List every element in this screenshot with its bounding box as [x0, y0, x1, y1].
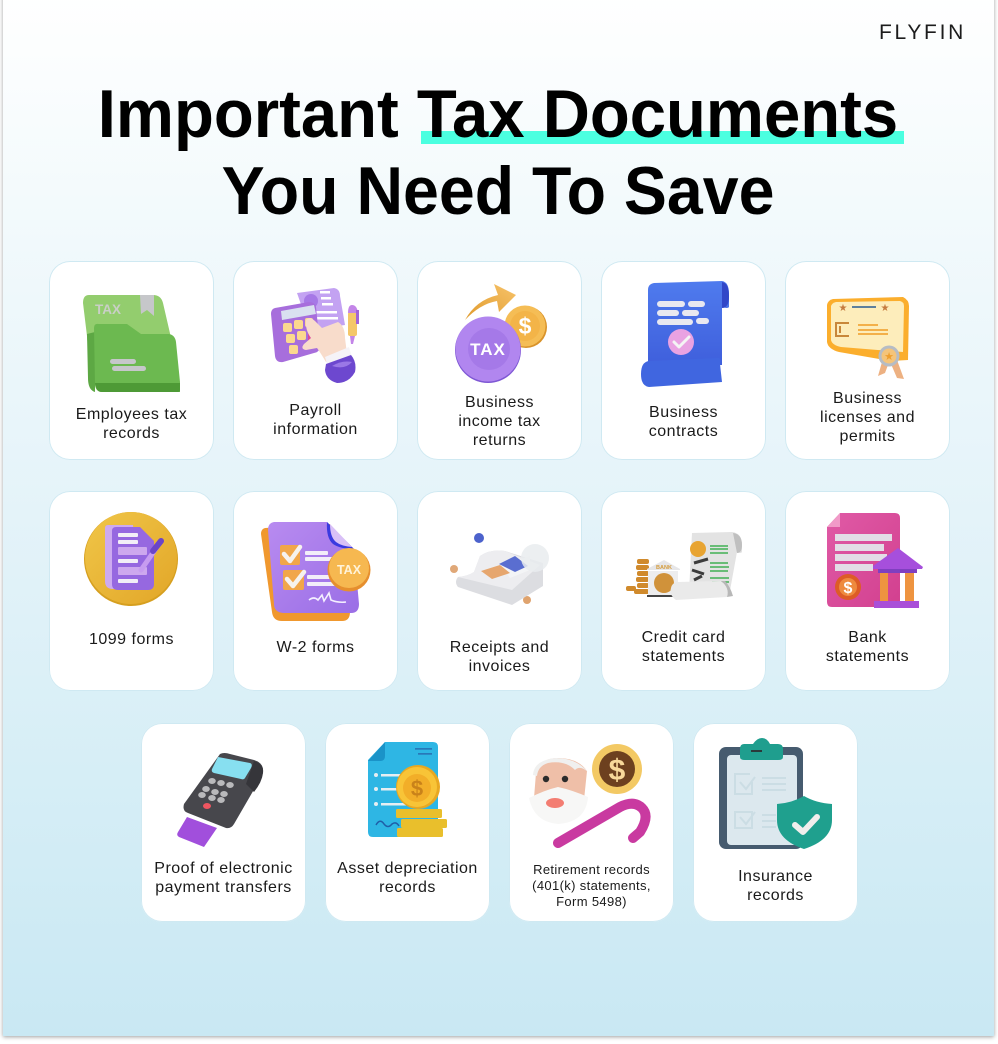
card: Employees tax records	[49, 261, 214, 460]
card: Proof of electronic payment transfers	[141, 723, 306, 922]
label: Payroll	[289, 402, 342, 419]
label: Business	[833, 390, 902, 407]
label: records	[379, 879, 436, 896]
icon: green tax folder	[83, 295, 180, 392]
label	[154, 860, 293, 896]
icon: blue document with coins	[368, 742, 447, 837]
icon: W-2 form with tax coin: TAX	[337, 563, 362, 577]
label: Credit card	[642, 629, 725, 646]
label	[738, 868, 813, 904]
icon: certificate with seal: ★	[839, 303, 848, 314]
icon: 1099 form on gold disc	[84, 512, 178, 606]
label: Asset depreciation	[337, 860, 478, 877]
card: W-2 forms	[233, 491, 398, 691]
label	[826, 629, 909, 665]
card: Business income tax returns	[417, 261, 582, 460]
label: records	[103, 425, 160, 442]
card: Payroll information	[233, 261, 398, 460]
label	[532, 862, 651, 909]
icon: old man, coin and cane: $	[609, 754, 626, 787]
icon: tax coin with arrow: $	[519, 313, 532, 339]
label	[76, 406, 187, 442]
label: income tax	[458, 413, 541, 430]
label: Proof of electronic	[154, 860, 293, 877]
icon: bank, coins and statement	[626, 532, 742, 600]
title highlight	[421, 131, 904, 144]
card: Receipts and invoices	[417, 491, 582, 691]
label: statements	[826, 648, 909, 665]
label	[337, 860, 478, 896]
label	[820, 390, 915, 445]
label: information	[273, 421, 358, 438]
label: Business	[465, 394, 534, 411]
card: Asset depreciation records	[325, 723, 490, 922]
label: returns	[473, 432, 526, 449]
icon: clipboard with shield	[719, 738, 832, 849]
icon: bank, coins and statement: BANK	[656, 565, 672, 571]
label: Receipts and	[450, 639, 549, 656]
card: 1099 forms	[49, 491, 214, 691]
card: Business contracts	[601, 261, 766, 460]
icon: old man, coin and cane	[530, 744, 651, 848]
label: Form 5498)	[556, 894, 627, 909]
label	[450, 639, 549, 675]
icon: certificate with seal: ★	[884, 350, 894, 363]
label	[649, 404, 718, 440]
icon: receipt printer	[450, 533, 549, 605]
label: 1099 forms	[89, 631, 174, 648]
label	[642, 629, 725, 665]
card: Credit card statements	[601, 491, 766, 691]
label: (401(k) statements,	[532, 878, 651, 893]
card: Business licenses and permits	[785, 261, 950, 460]
title line 1: Important Tax Documents	[98, 76, 898, 152]
title line 2: You Need To Save	[222, 153, 774, 229]
icon: tax coin with arrow	[455, 284, 547, 383]
icon: blue document with coins: $	[411, 776, 423, 801]
icon: pink statement with bank: $	[844, 580, 853, 597]
icon: green tax folder: TAX	[95, 302, 121, 317]
card: Insurance records	[693, 723, 858, 922]
label: W-2 forms	[276, 639, 354, 656]
card: Retirement records	[509, 723, 674, 922]
icon: tax coin with arrow: TAX	[470, 340, 506, 359]
label: licenses and	[820, 409, 915, 426]
label: Bank	[848, 629, 887, 646]
icon: calculator and hand	[271, 288, 359, 383]
icon: pink statement with bank	[827, 513, 923, 608]
icon: certificate with seal: ★	[881, 303, 890, 314]
icon: W-2 form with tax coin	[261, 522, 370, 621]
card: Bank statements	[785, 491, 950, 691]
icon: card payment terminal	[177, 753, 264, 847]
icon: certificate with seal	[827, 297, 909, 379]
label: permits	[840, 428, 895, 445]
label	[458, 394, 541, 449]
label: payment transfers	[155, 879, 292, 896]
label: Insurance	[738, 868, 813, 885]
logo: FLYFIN: FLYFIN	[879, 21, 966, 44]
label: Retirement records	[533, 862, 650, 877]
label: records	[747, 887, 804, 904]
label: statements	[642, 648, 725, 665]
label: contracts	[649, 423, 718, 440]
label: invoices	[469, 658, 530, 675]
label: Employees tax	[76, 406, 187, 423]
icon: blue scroll contract	[641, 281, 729, 387]
label: Business	[649, 404, 718, 421]
label	[273, 402, 358, 438]
